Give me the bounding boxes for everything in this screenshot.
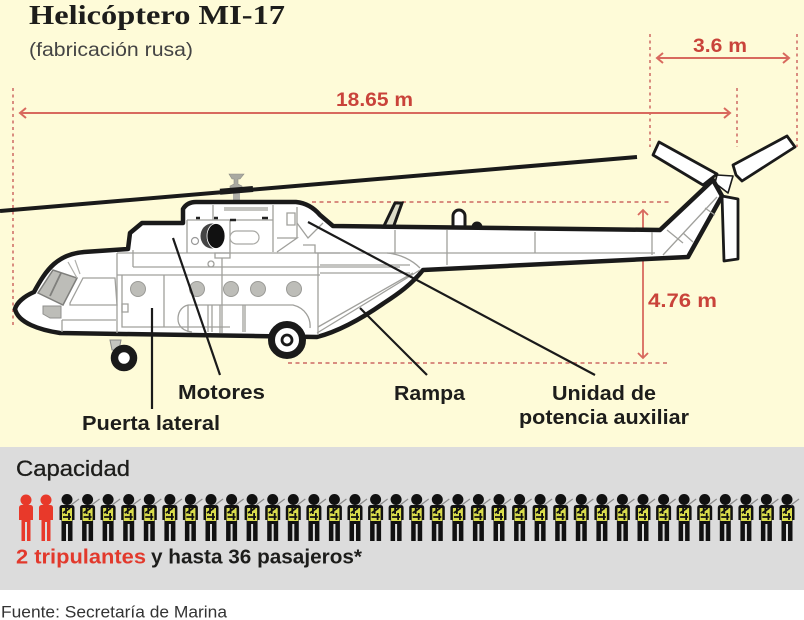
tail boom hump: [453, 210, 482, 232]
panel: capacidad: [0, 447, 804, 590]
label: Motores: Motores: [178, 381, 265, 404]
dimension: rotor 3.6 m: 3.6 m: [693, 35, 747, 57]
dimension: height 4.76 m: [288, 202, 717, 363]
dimension: rotor 3.6 m: [650, 34, 797, 147]
structural panel lines: [62, 197, 717, 335]
fuselage outline: [15, 180, 722, 337]
forward cabin: [117, 250, 400, 333]
label: Unidad de potencia auxiliar: Unidad de: [552, 383, 656, 405]
capacity text: y hasta 36 pasajeros*: [151, 546, 362, 568]
front landing gear: [110, 340, 134, 368]
crew icons: [19, 494, 53, 541]
label: Puerta lateral: Puerta lateral: [82, 412, 220, 435]
label: Rampa: Rampa: [394, 382, 466, 405]
main rotor blade: [0, 157, 637, 211]
lower fuel tank: [178, 305, 310, 333]
portholes: [130, 282, 302, 296]
capacity text: 2 tripulantes: [16, 546, 146, 568]
tail rotor: [653, 136, 795, 261]
label: Unidad de potencia auxiliar: [519, 383, 689, 429]
helicopter: [0, 136, 795, 368]
cockpit windows: [38, 260, 80, 318]
passenger icons: 36 soldiers: [60, 494, 799, 541]
dimension: length 18.65 m: [13, 88, 737, 326]
callout lines: [152, 222, 595, 409]
tail fin top antenna: [383, 203, 402, 228]
ramp: [317, 253, 420, 333]
label: Unidad de potencia auxiliar: potencia auxiliar: [519, 407, 689, 429]
title: Helicóptero MI-17: [29, 0, 285, 30]
main rotor mast: [229, 174, 244, 204]
engine intake: [192, 207, 268, 248]
background: cream: [0, 0, 804, 447]
nose and side window: [62, 278, 117, 332]
tail boom: [315, 197, 717, 273]
heading: Capacidad: Capacidad: [16, 456, 130, 481]
subtitle: (fabricación rusa): [29, 39, 193, 61]
capacity text: [16, 546, 362, 568]
main landing gear: [272, 324, 302, 356]
dimension: height 4.76 m: 4.76 m: [648, 290, 717, 312]
dimension: length 18.65 m: 18.65 m: [336, 89, 413, 111]
